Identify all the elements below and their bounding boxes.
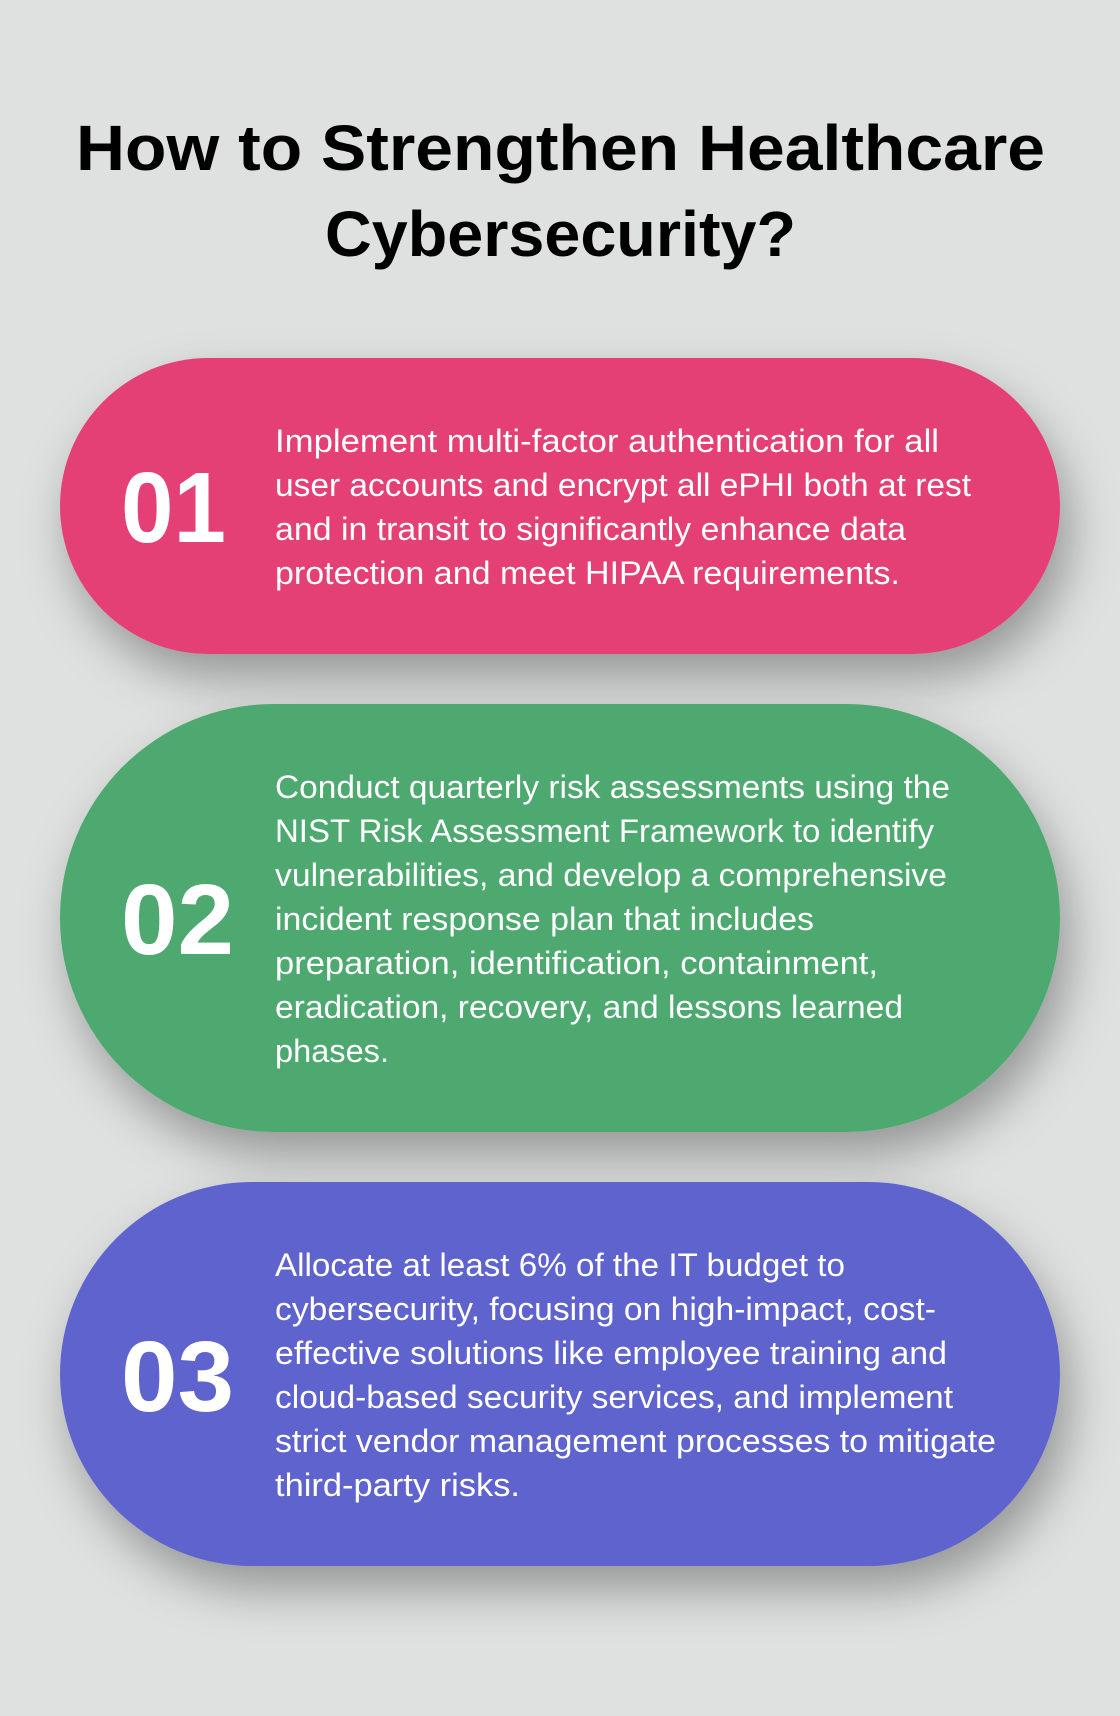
panel: step 02	[60, 704, 1060, 1132]
text block: step 02 description: eradication, recovery, and lessons learned	[275, 989, 903, 1025]
text block: step 02 description: NIST Risk Assessment Framework to identify	[275, 813, 934, 849]
pill: step 03 background	[60, 1182, 1060, 1566]
text block: step 01 description	[275, 423, 971, 591]
text block: step 03 description: cybersecurity, focusing on high-impact, cost-	[275, 1291, 936, 1327]
panel: step 03	[60, 1182, 1060, 1566]
number: 01: 01	[121, 452, 226, 564]
text block: step 01 description: Implement multi-factor authentication for all	[275, 423, 939, 459]
text block: step 03 description: effective solutions like employee training and	[275, 1335, 947, 1371]
text block: step 03 description: strict vendor management processes to mitigate	[275, 1423, 996, 1459]
text block: step 02 description: incident response plan that includes	[275, 901, 814, 937]
text block: step 03 description	[275, 1247, 996, 1503]
text block: step 01 description: protection and meet HIPAA requirements.	[275, 555, 900, 591]
number: 02: 02	[121, 864, 234, 976]
panel: step 01	[60, 358, 1060, 654]
title: How to Strengthen Healthcare	[76, 112, 1045, 184]
text block: step 03 description: cloud-based security services, and implement	[275, 1379, 953, 1415]
text block: step 02 description: Conduct quarterly risk assessments using the	[275, 769, 950, 805]
text block: step 01 description: and in transit to significantly enhance data	[275, 511, 906, 547]
number: 03: 03	[121, 1321, 234, 1433]
text block: step 02 description: phases.	[275, 1033, 389, 1069]
title	[76, 112, 1045, 270]
pill: step 02 background	[60, 704, 1060, 1132]
text block: step 02 description: vulnerabilities, and develop a comprehensive	[275, 857, 947, 893]
title: Cybersecurity?	[325, 198, 796, 270]
pill: step 01 background	[60, 358, 1060, 654]
text block: step 03 description: third-party risks.	[275, 1467, 520, 1503]
text block: step 03 description: Allocate at least 6% of the IT budget to	[275, 1247, 845, 1283]
text block: step 02 description	[275, 769, 950, 1069]
text block: step 02 description: preparation, identification, containment,	[275, 945, 878, 981]
text block: step 01 description: user accounts and encrypt all ePHI both at rest	[275, 467, 971, 503]
